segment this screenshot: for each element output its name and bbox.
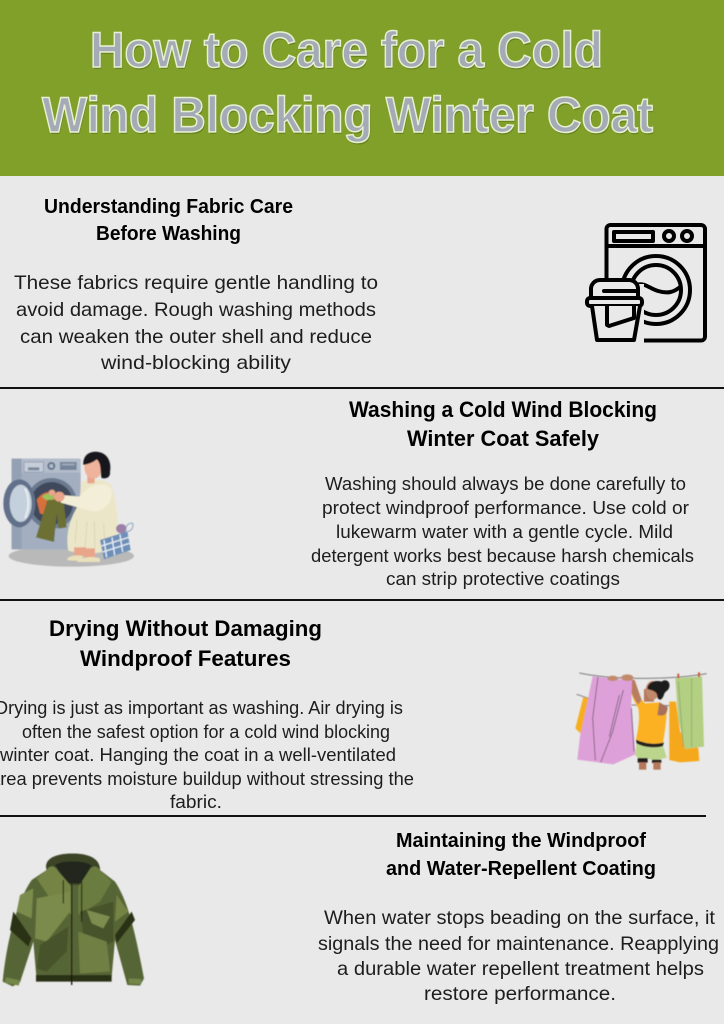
title: How to Care for a Cold bbox=[91, 24, 604, 80]
illustration: woman hanging laundry bbox=[575, 672, 707, 770]
text block: drying body bbox=[0, 697, 414, 812]
text block: coating body: signals the need for maintenance. Reapplying bbox=[318, 933, 719, 955]
text block: washing body: protect windproof performance. Use cold or bbox=[322, 497, 689, 518]
heading: understanding fabric care bbox=[44, 196, 293, 245]
heading: maintaining coating bbox=[386, 830, 656, 880]
heading: understanding fabric care: Before Washing bbox=[96, 223, 241, 245]
text block: drying body: winter coat. Hanging the coat in a well-ventilated bbox=[0, 744, 396, 765]
illustration: woman loading washing machine bbox=[3, 452, 134, 567]
text block: washing body: detergent works best because harsh chemicals bbox=[311, 545, 694, 566]
divider bbox=[0, 387, 724, 389]
divider bbox=[0, 815, 706, 817]
panel: drying bbox=[0, 616, 707, 812]
title bbox=[42, 22, 654, 145]
heading: washing safely: Washing a Cold Wind Blocking bbox=[349, 397, 657, 422]
heading: drying bbox=[49, 616, 322, 671]
text block: fabric care body bbox=[14, 272, 378, 374]
heading: maintaining coating: Maintaining the Windproof bbox=[396, 830, 646, 852]
text block: drying body: Drying is just as important as washing. Air drying is bbox=[0, 697, 403, 718]
icon: washing machine and laundry basket bbox=[587, 225, 705, 345]
divider bbox=[0, 599, 724, 601]
text block: washing body: can strip protective coatings bbox=[386, 568, 620, 589]
text block: washing body: Washing should always be done carefully to bbox=[325, 473, 686, 494]
text block: washing body: lukewarm water with a gentle cycle. Mild bbox=[336, 521, 673, 542]
heading: understanding fabric care: Understanding Fabric Care bbox=[44, 196, 293, 218]
panel: maintaining coating bbox=[3, 830, 719, 1005]
heading: washing safely: Winter Coat Safely bbox=[407, 426, 600, 451]
text block: drying body: often the safest option for a cold wind blocking bbox=[22, 721, 390, 742]
panel: washing safely bbox=[3, 397, 694, 589]
text block: fabric care body: wind-blocking ability bbox=[100, 352, 291, 374]
heading: drying: Windproof Features bbox=[80, 646, 291, 671]
text block: drying body: area prevents moisture buildup without stressing the bbox=[0, 768, 414, 789]
heading: maintaining coating: and Water-Repellent Coating bbox=[386, 858, 656, 880]
text block: fabric care body: avoid damage. Rough washing methods bbox=[16, 299, 376, 321]
heading: washing safely bbox=[349, 397, 657, 451]
text block: coating body: When water stops beading on the surface, it bbox=[324, 907, 716, 929]
text block: drying body: fabric. bbox=[170, 791, 222, 812]
heading: drying: Drying Without Damaging bbox=[49, 616, 322, 641]
text block: coating body: restore performance. bbox=[424, 983, 616, 1005]
title: How to Care for a Cold bbox=[90, 22, 603, 78]
text block: fabric care body: can weaken the outer shell and reduce bbox=[20, 326, 372, 348]
title: Wind Blocking Winter Coat bbox=[42, 87, 653, 143]
text block: coating body: a durable water repellent treatment helps bbox=[337, 958, 704, 980]
text block: washing body bbox=[311, 473, 694, 589]
text block: coating body bbox=[318, 907, 719, 1005]
panel: understanding fabric care bbox=[14, 196, 705, 374]
title: Wind Blocking Winter Coat bbox=[43, 89, 654, 145]
header banner bbox=[0, 0, 724, 176]
illustration: olive green hooded jacket bbox=[3, 854, 144, 986]
text block: fabric care body: These fabrics require gentle handling to bbox=[14, 272, 378, 294]
